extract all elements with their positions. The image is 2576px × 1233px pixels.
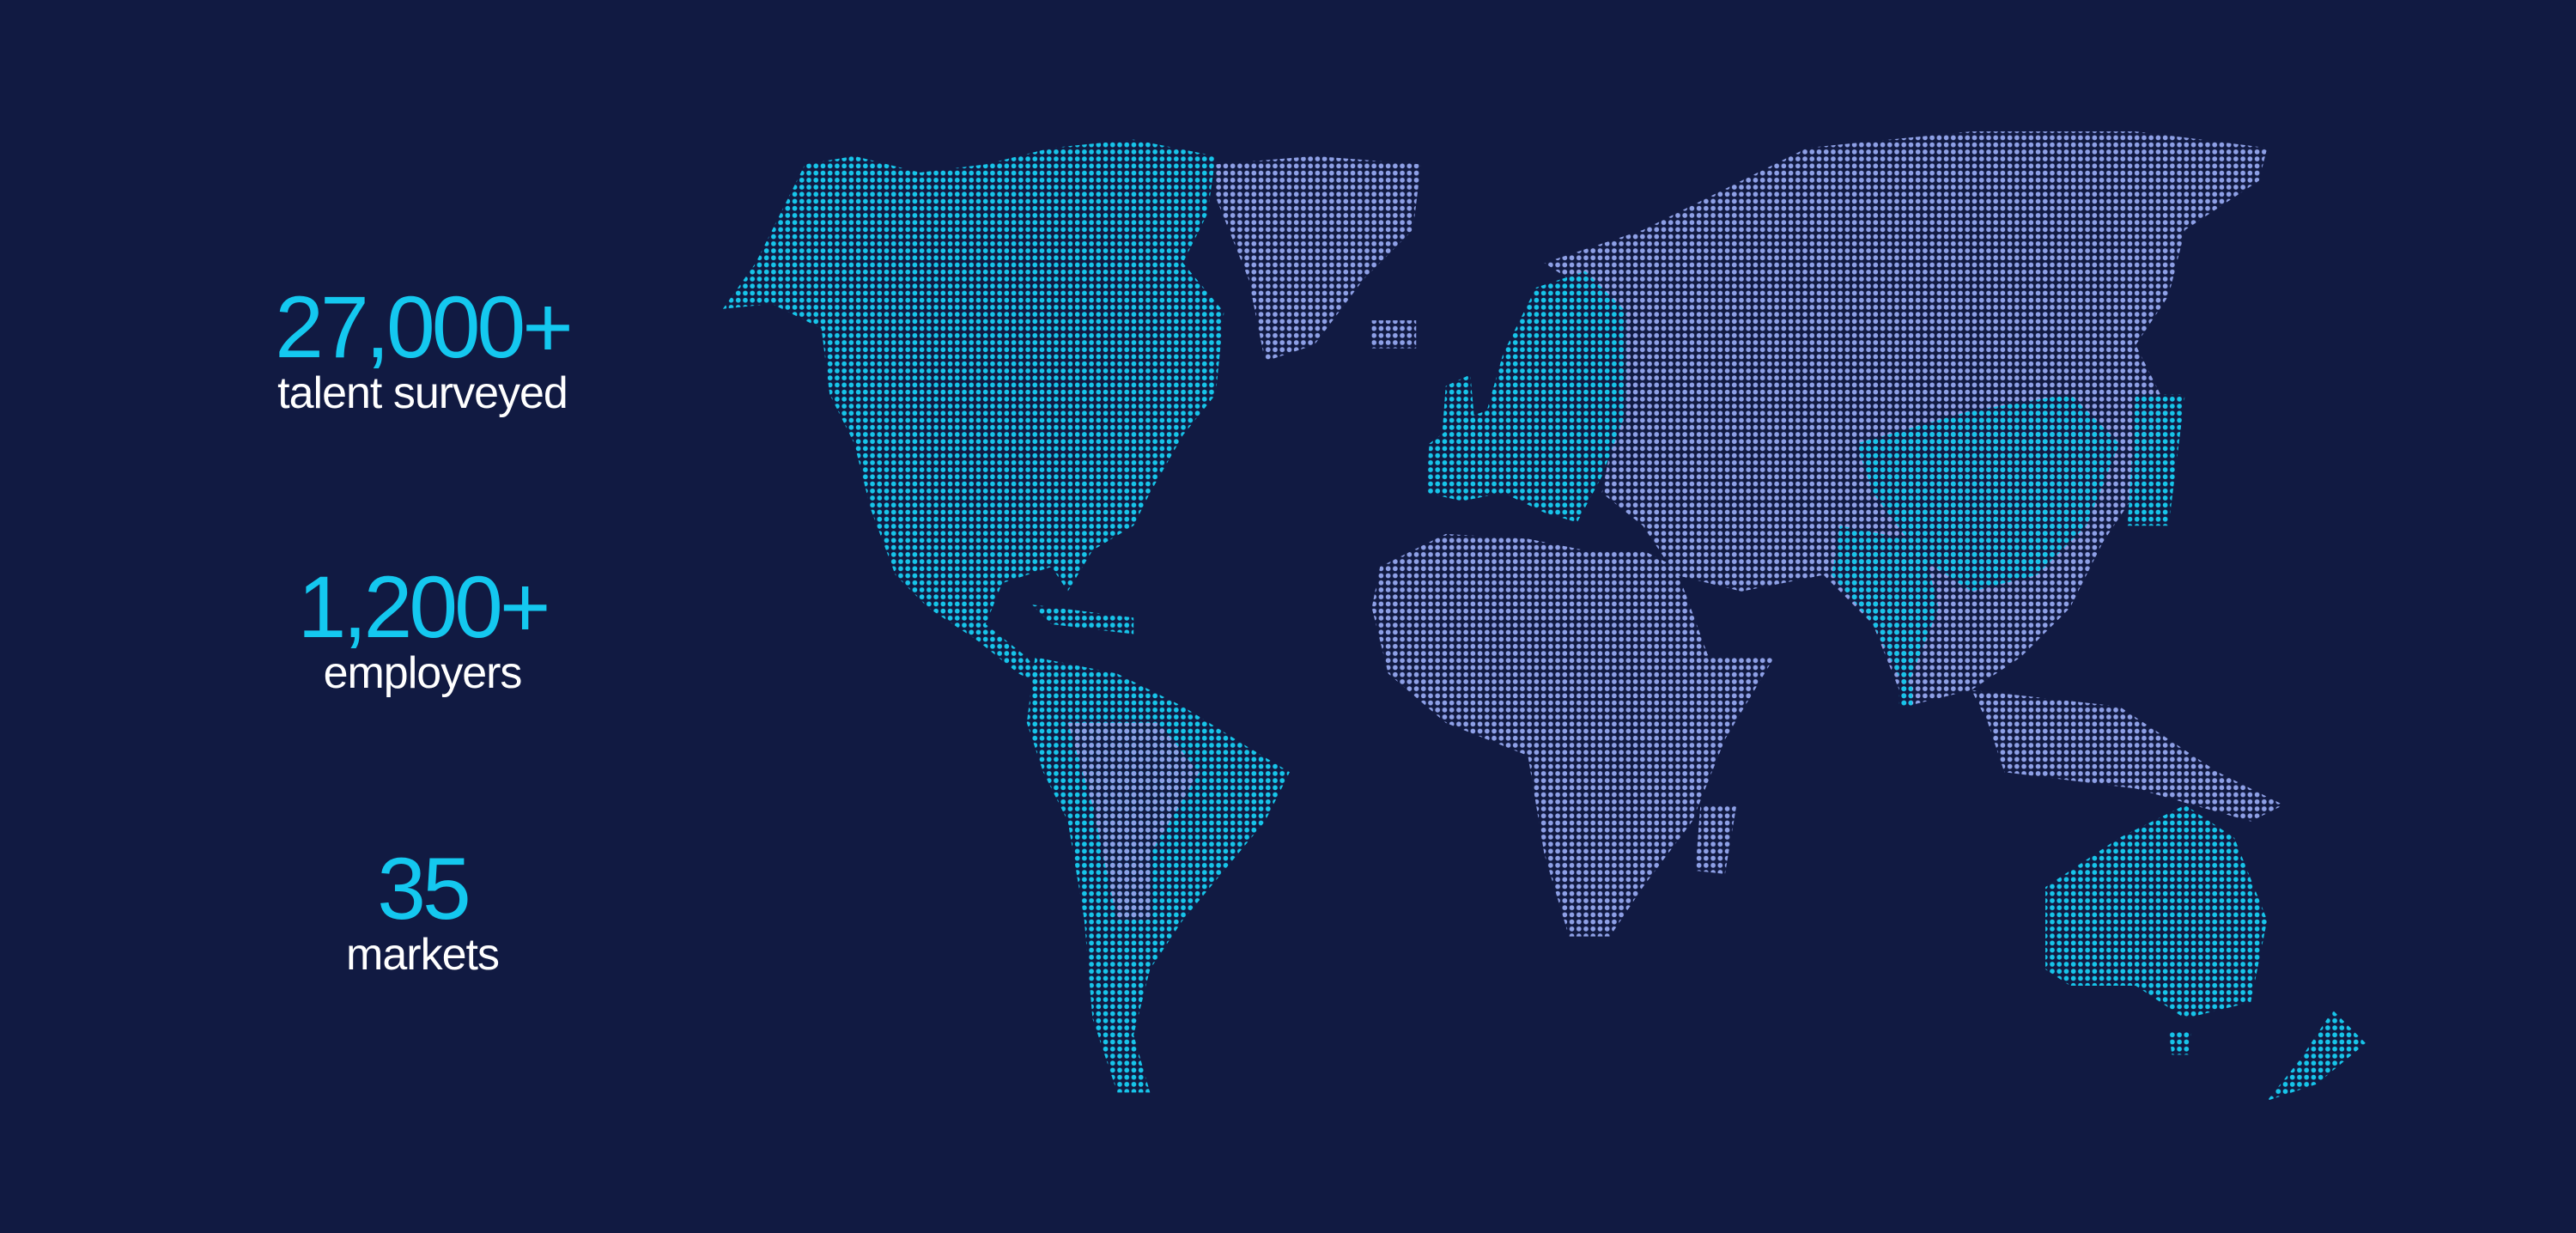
region: Europe (1426, 271, 1626, 522)
label: markets: markets (346, 930, 499, 980)
region: Asia (1545, 131, 2267, 707)
region: Iceland (1372, 320, 1416, 349)
region: UK (1443, 374, 1475, 430)
region: Africa and Middle East (1372, 534, 1774, 937)
stat: markets (346, 840, 499, 980)
region: Australia (2045, 805, 2267, 1054)
region: India (1832, 525, 1939, 690)
label: employers: employers (324, 648, 521, 698)
region: Sri Lanka (1899, 687, 1912, 707)
region: Southeast Asia (1971, 690, 2283, 822)
region: New Zealand (2267, 1011, 2366, 1101)
number: 27,000+: 27,000+ (275, 278, 570, 376)
number: 35: 35 (377, 840, 468, 938)
stat: talent surveyed (275, 278, 570, 418)
region: South America (1027, 657, 1290, 1092)
number: 1,200+: 1,200+ (298, 558, 547, 656)
region: China (1856, 394, 2119, 592)
region: North America (723, 140, 1224, 690)
label: talent surveyed: talent surveyed (277, 368, 568, 418)
region: Japan (2128, 394, 2185, 525)
stat: employers (298, 558, 547, 698)
region: Greenland (1216, 156, 1421, 361)
